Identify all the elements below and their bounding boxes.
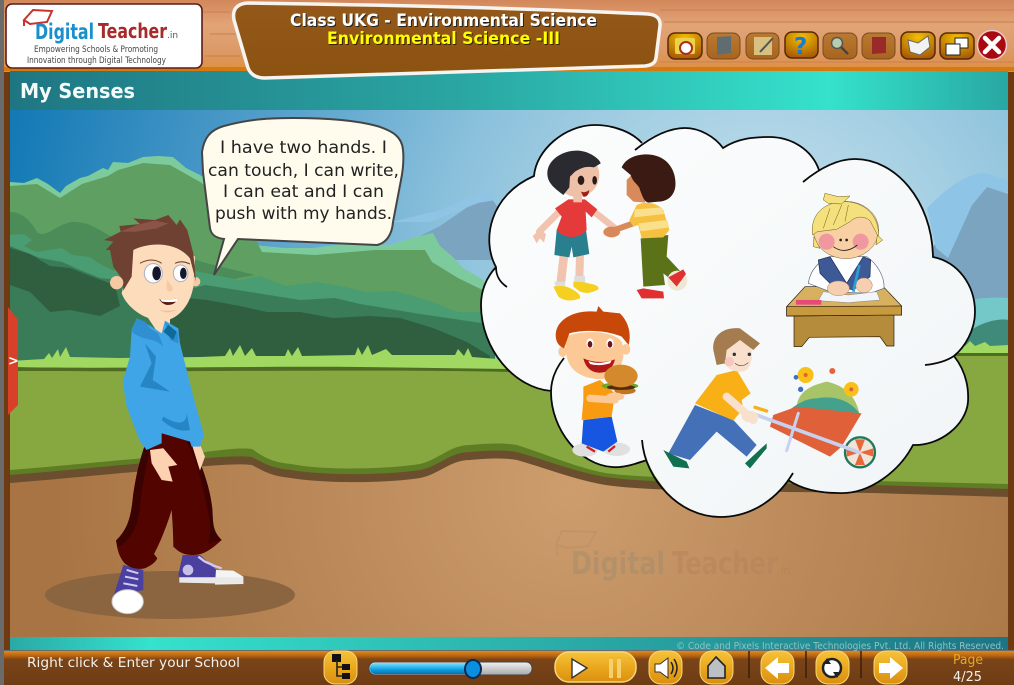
refresh button: [816, 651, 849, 684]
course title plaque: Class UKG - Environmental Science: [290, 11, 597, 31]
icon: dictionary: [862, 33, 895, 59]
shoes: [112, 555, 243, 614]
logo panel: Digital: [35, 20, 94, 44]
mountains: [392, 173, 1008, 340]
title bar: My Senses: My Senses: [20, 79, 135, 103]
scene background: [10, 110, 1008, 637]
bottom teal strip with copyright: © Code and Pixels Interactive Technologies Pvt. Ltd. All Rights Reserved.: [676, 641, 1004, 652]
speech bubble: can touch, I can write,: [208, 161, 399, 181]
logo cap icon: [24, 10, 52, 26]
neck: [145, 313, 170, 337]
course title plaque: Environmental Science -III: [327, 29, 560, 49]
icon: magnifier: [823, 33, 857, 59]
forward button: [874, 651, 907, 684]
home button: [700, 651, 733, 684]
ground brown edge: [10, 450, 1008, 510]
illustration: boy writing at desk: [787, 193, 902, 347]
cartoon boy: [45, 215, 295, 619]
side tab: >: [8, 354, 19, 369]
illustration: boy eating burger and boy pushing wheelbarrow: [556, 306, 875, 468]
ground: [10, 458, 1008, 637]
icon: reference book: [707, 33, 740, 59]
icon: notepad: [746, 33, 779, 59]
progress slider: [369, 660, 532, 678]
ground dark edge: [10, 444, 1008, 510]
bottom control bar: Right click & Enter your School: [27, 655, 240, 671]
watermark: Digital Teacher.in: Teacher: [672, 546, 779, 582]
sound button: [649, 651, 682, 684]
logo panel: .in: [167, 31, 178, 41]
bottom teal strip with copyright: [10, 637, 1008, 652]
logo panel: Empowering Schools & Promoting: [34, 45, 158, 55]
page counter: Page: [953, 653, 983, 668]
page counter: [953, 653, 983, 685]
tree button: [324, 651, 357, 684]
icon: help: [785, 32, 818, 60]
speech bubble: [202, 118, 403, 275]
boy eating burger: [556, 306, 638, 457]
watermark: Digital Teacher.in: [556, 531, 791, 582]
back button: [761, 651, 794, 684]
icon: close: [978, 30, 1006, 60]
head: [104, 215, 200, 321]
speech bubble: I have two hands. I: [220, 138, 387, 158]
icon: clock folder: [668, 33, 702, 59]
header wood bar: [4, 0, 1014, 72]
logo panel: Innovation through Digital Technology: [27, 56, 167, 66]
wheelbarrow with plants: [742, 367, 875, 467]
thought cloud: [481, 125, 975, 517]
toolbar icons: [668, 30, 1006, 60]
illustration: two boys shaking hands: [533, 151, 687, 300]
icon: help: ?: [794, 34, 807, 60]
hoodie: [123, 318, 204, 450]
title bar: My Senses: [10, 71, 1008, 110]
watermark: Digital Teacher.in: .in: [777, 564, 791, 577]
sky: [10, 110, 1008, 510]
play and pause: [555, 652, 636, 682]
boy in striped shirt: [603, 154, 687, 298]
boy in red shirt: [533, 151, 615, 300]
speech bubble: I can eat and I can: [223, 182, 384, 202]
bottom control bar: [4, 651, 1014, 685]
speech bubble: push with my hands.: [215, 204, 392, 224]
logo panel: [6, 4, 202, 68]
side tab: [8, 307, 19, 415]
trees back layer: [10, 156, 495, 350]
trousers: [116, 433, 222, 569]
icon: open book: [901, 32, 935, 59]
logo panel: Teacher: [98, 19, 167, 43]
floor shadow: [45, 571, 295, 619]
watermark: Digital Teacher.in: Digital: [571, 546, 665, 582]
grass strip: [10, 345, 510, 372]
hands: [150, 446, 205, 482]
field: [10, 369, 510, 500]
page counter: 4/25: [953, 670, 982, 685]
icon: window resize: [940, 33, 974, 59]
boy pushing wheelbarrow: [663, 328, 767, 468]
course title plaque: [234, 3, 660, 78]
